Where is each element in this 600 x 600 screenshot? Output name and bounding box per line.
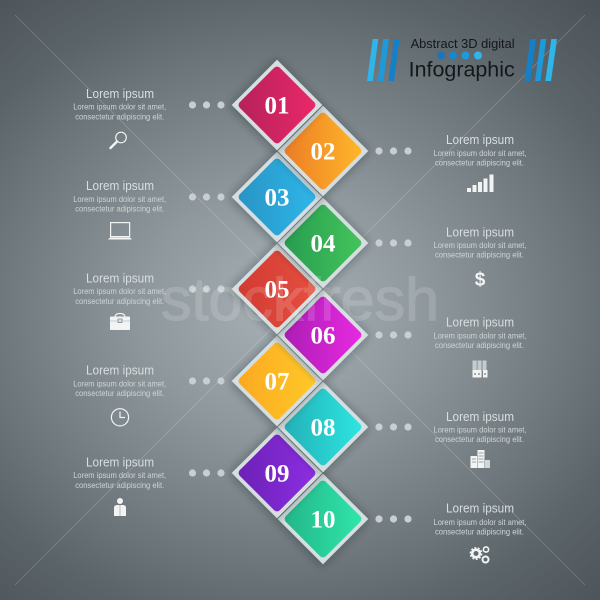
- text block 10: [434, 502, 526, 536]
- diamond 08: [278, 382, 368, 472]
- diamond 02: [278, 106, 368, 196]
- text block 06: [434, 316, 526, 350]
- text block 09: Lorem ipsum: [86, 455, 154, 469]
- icon: magnifier: [110, 132, 126, 148]
- connector dots right: [375, 147, 412, 523]
- text block 04: [434, 225, 526, 260]
- icon: laptop: [108, 223, 132, 240]
- text block 09: consectetur adipiscing elit.: [75, 480, 164, 490]
- text block 05: Lorem ipsum dolor sit amet,: [73, 286, 166, 296]
- text block 06: Lorem ipsum: [446, 316, 514, 330]
- text block 01: Lorem ipsum: [86, 87, 154, 101]
- header dots: [437, 52, 482, 60]
- text block 03: [73, 179, 166, 214]
- text block 02: [434, 133, 526, 167]
- text block 05: Lorem ipsum: [86, 271, 154, 285]
- icon: gears: [470, 547, 489, 562]
- watermark: stockfresh: [161, 266, 439, 333]
- text block 05: consectetur adipiscing elit.: [75, 296, 164, 306]
- text block 02: Lorem ipsum: [446, 133, 514, 147]
- diamond 07: 07: [264, 368, 290, 396]
- icon: clock: [111, 409, 129, 426]
- text block 02: Lorem ipsum dolor sit amet,: [434, 148, 526, 158]
- diamond 03: 03: [264, 184, 290, 212]
- text block 02: consectetur adipiscing elit.: [435, 157, 524, 167]
- diamond 01: 01: [264, 92, 290, 120]
- text block 06: Lorem ipsum dolor sit amet,: [434, 330, 526, 340]
- text block 07: [73, 364, 166, 398]
- text block 06: consectetur adipiscing elit.: [435, 340, 524, 350]
- text block 10: Lorem ipsum dolor sit amet,: [434, 517, 526, 527]
- text block 08: [434, 410, 526, 444]
- diamond 09: 09: [264, 460, 290, 488]
- icon: businessman: [114, 498, 126, 516]
- diamond 05: [232, 244, 322, 334]
- header subtitle: Abstract 3D digital: [411, 36, 515, 51]
- text block 04: Lorem ipsum: [446, 225, 514, 239]
- text block 08: Lorem ipsum: [446, 410, 514, 424]
- diamond 10: 10: [310, 506, 336, 534]
- header bars left: [367, 39, 400, 81]
- text block 10: Lorem ipsum: [446, 502, 514, 516]
- diamond 03: [232, 152, 322, 242]
- text block 07: Lorem ipsum: [86, 364, 154, 378]
- text block 07: Lorem ipsum dolor sit amet,: [73, 378, 166, 388]
- diamond 06: 06: [310, 322, 336, 350]
- diamond 04: [278, 198, 368, 288]
- diamond 07: [232, 336, 322, 426]
- connector dots left: [189, 101, 225, 477]
- text block 01: Lorem ipsum dolor sit amet,: [73, 102, 166, 112]
- diamond 09: [232, 428, 322, 518]
- diamond 04: 04: [310, 230, 336, 258]
- icon: dollar: $: [475, 270, 486, 290]
- text block 04: Lorem ipsum dolor sit amet,: [434, 240, 526, 250]
- text block 01: consectetur adipiscing elit.: [75, 111, 164, 121]
- diamond 01: [232, 60, 322, 150]
- header bars right: [524, 39, 557, 81]
- text block 08: consectetur adipiscing elit.: [435, 434, 524, 444]
- text block 09: Lorem ipsum dolor sit amet,: [73, 470, 166, 480]
- text block 05: [73, 271, 166, 306]
- header title: Infographic: [409, 58, 515, 82]
- text block 03: Lorem ipsum: [86, 179, 154, 193]
- diamond 10: [278, 474, 368, 564]
- text block 10: consectetur adipiscing elit.: [435, 526, 524, 536]
- text block 04: consectetur adipiscing elit.: [435, 250, 524, 260]
- text block 07: consectetur adipiscing elit.: [75, 388, 164, 398]
- icon: buildings: [470, 450, 490, 468]
- text block 01: [73, 87, 166, 121]
- diamond 02: 02: [310, 138, 336, 166]
- text block 03: consectetur adipiscing elit.: [75, 204, 164, 214]
- text block 08: Lorem ipsum dolor sit amet,: [434, 425, 526, 435]
- text block 09: [73, 455, 166, 490]
- header: abstract 3D digital infographic: [367, 36, 557, 82]
- icon: briefcase: [110, 314, 130, 330]
- icon: signal bars: [467, 174, 494, 192]
- diamond 06: [278, 290, 368, 380]
- icon: binders: [472, 360, 488, 378]
- text block 03: Lorem ipsum dolor sit amet,: [73, 194, 166, 204]
- diamond 08: 08: [310, 414, 336, 442]
- diamond 05: 05: [264, 276, 290, 304]
